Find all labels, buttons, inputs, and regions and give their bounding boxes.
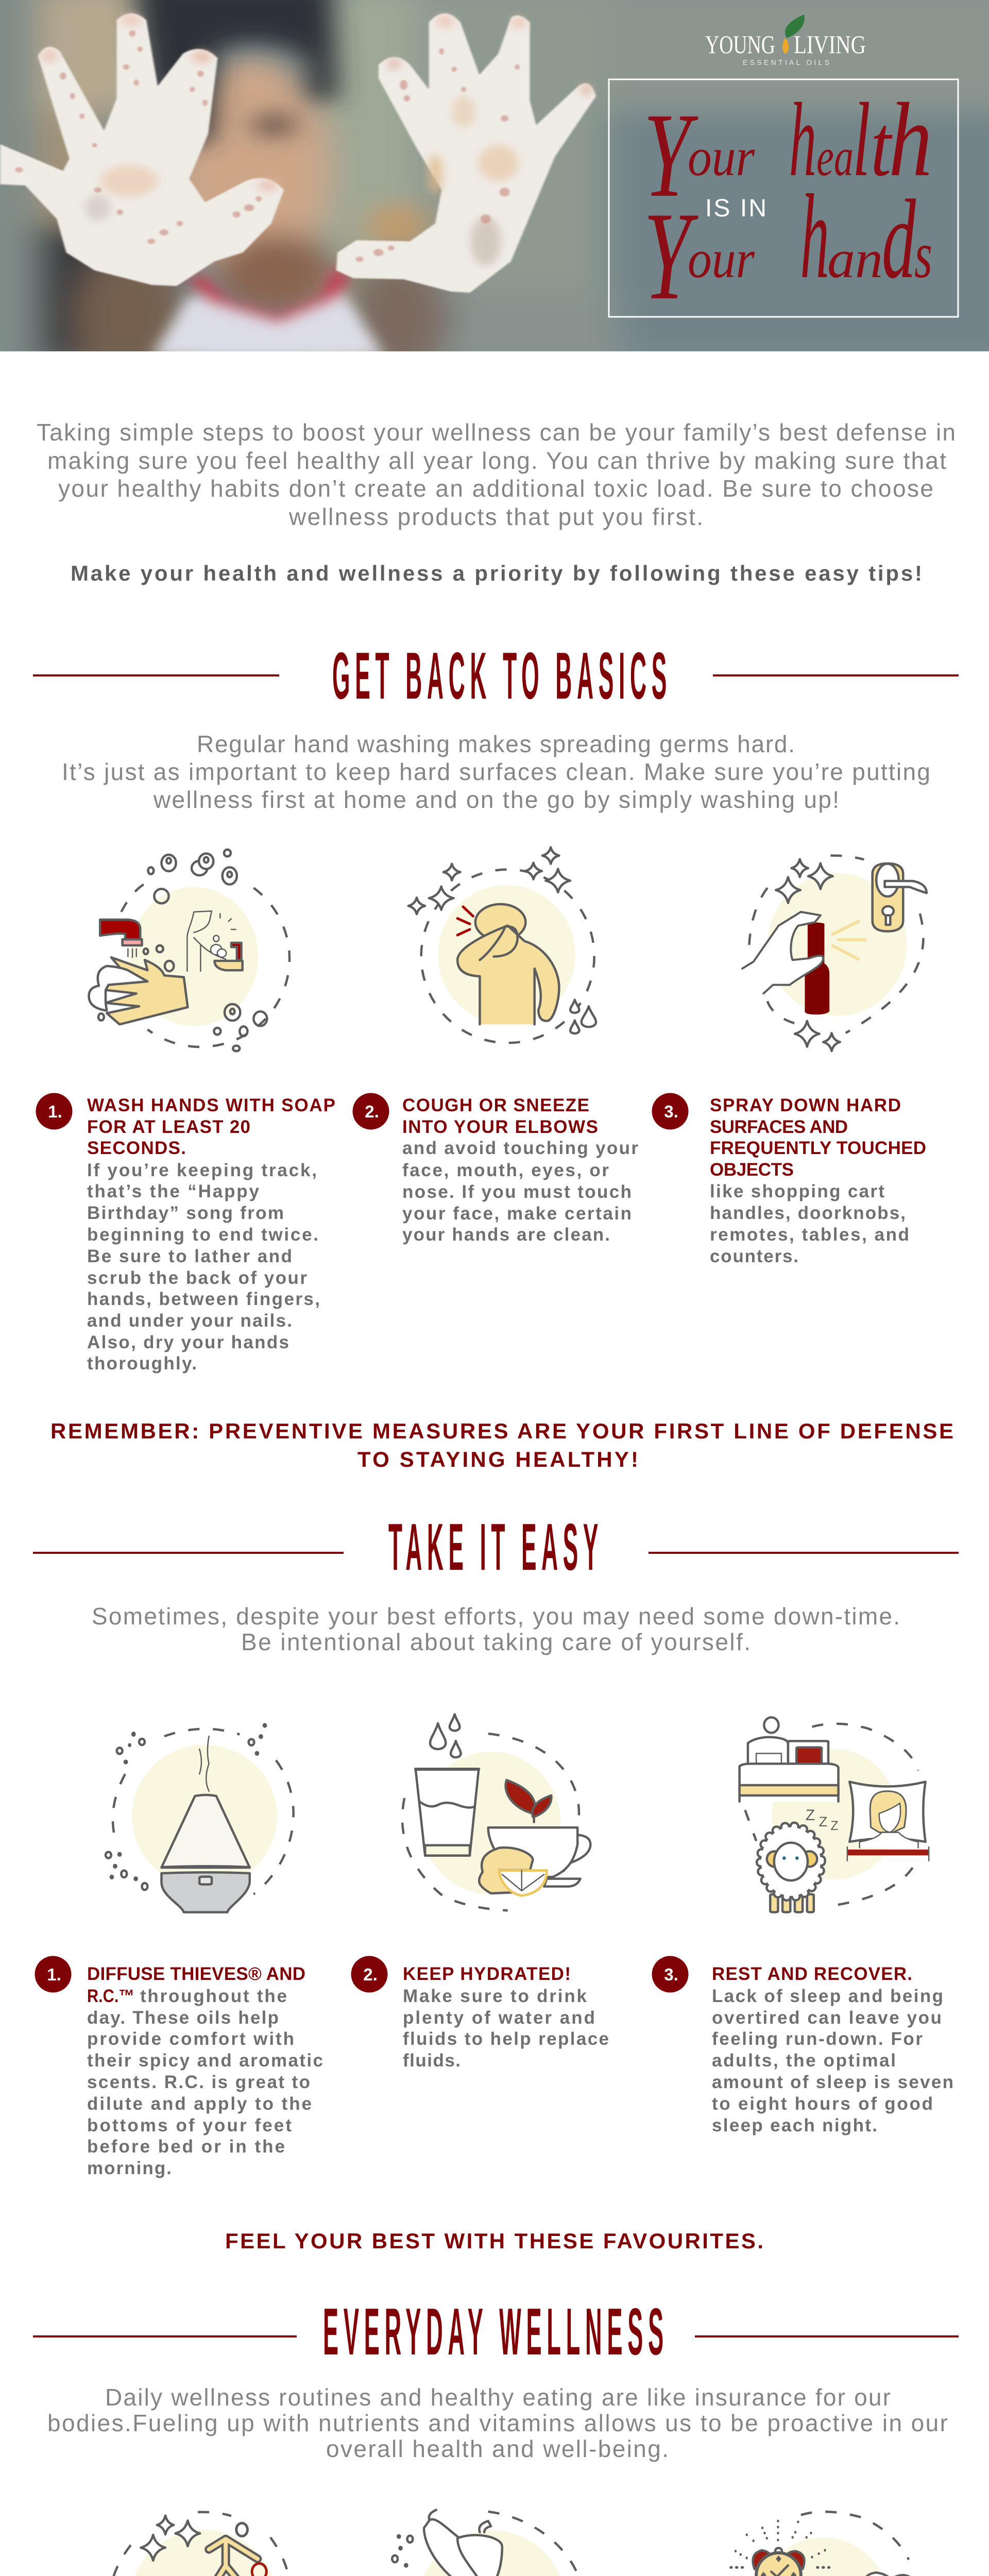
icon: bed, sheep and sleeper bbox=[740, 1717, 929, 1912]
tip 1: wash hands bbox=[36, 1093, 335, 1374]
section intro: basics: wellness first at home and on the go by simply washing up! bbox=[153, 786, 839, 813]
icon: exercise figures bbox=[101, 2512, 291, 2576]
tip 1: wash hands: Be sure to lather and bbox=[87, 1246, 292, 1266]
label: sleeping Zs: Z bbox=[806, 1807, 815, 1824]
tip 1: wash hands: thoroughly. bbox=[87, 1353, 197, 1374]
tip 1: diffuse: R.C.™ bbox=[87, 1986, 134, 2006]
tip 1: wash hands: that’s the “Happy bbox=[87, 1181, 260, 1201]
tip 1: diffuse: throughout the bbox=[140, 1986, 287, 2006]
hero title box: h bbox=[775, 81, 816, 198]
tip 3: rest: adults, the optimal bbox=[712, 2050, 896, 2071]
tip 1: wash hands: 1. bbox=[48, 1102, 62, 1121]
tip 1: diffuse: scents. R.C. is great to bbox=[87, 2072, 310, 2092]
soap foam speckles bbox=[15, 30, 520, 262]
Young Living logo bbox=[705, 14, 866, 66]
hero title box: our bbox=[688, 127, 755, 187]
tip 1: wash hands: Birthday” song from bbox=[87, 1203, 284, 1223]
tip 2: hydrate: 2. bbox=[363, 1965, 378, 1984]
tip 1: wash hands: scrub the back of your bbox=[87, 1268, 307, 1288]
tip 1: diffuse: DIFFUSE THIEVES® AND bbox=[87, 1964, 305, 1984]
Young Living logo: YOUNG bbox=[705, 30, 775, 59]
hero title box: h bbox=[786, 170, 829, 303]
hero title box: Y bbox=[643, 88, 698, 222]
section intro: basics bbox=[62, 731, 930, 813]
icon: healthy foods bbox=[392, 2510, 611, 2576]
intro text: Taking simple steps to boost your wellness can be your family’s best defense in bbox=[37, 419, 956, 446]
tip 2: cough or sneeze: your face, make certain bbox=[402, 1204, 632, 1224]
tip 2: cough or sneeze bbox=[352, 1093, 638, 1245]
tip 2: cough or sneeze: face, mouth, eyes, or bbox=[402, 1160, 609, 1180]
tip 1: diffuse: dilute and apply to the bbox=[87, 2094, 312, 2114]
tip 3: rest: to eight hours of good bbox=[712, 2094, 933, 2114]
label: sleeping Zs: Z bbox=[819, 1814, 827, 1829]
tip 2: cough or sneeze: COUGH OR SNEEZE bbox=[402, 1095, 589, 1115]
icon: water, tea and lemon bbox=[402, 1714, 590, 1910]
tip 1: diffuse: their spicy and aromatic bbox=[87, 2050, 323, 2071]
icon: diffuser bbox=[106, 1723, 294, 1912]
hero title box: t bbox=[871, 97, 893, 194]
section intro: take it easy: Sometimes, despite your best efforts, you may need some down-time. bbox=[92, 1603, 900, 1630]
tip 1: diffuse: day. These oils help bbox=[87, 2008, 279, 2028]
section intro: everyday wellness: Daily wellness routines and healthy eating are like insurance for our bbox=[105, 2384, 891, 2411]
section intro: basics: It’s just as important to keep hard surfaces clean. Make sure you’re putting bbox=[62, 758, 930, 785]
hero title box: s bbox=[914, 218, 932, 292]
tip 2: hydrate: fluids. bbox=[403, 2050, 461, 2071]
section heading: everyday wellness bbox=[33, 2295, 959, 2369]
tip 1: diffuse bbox=[35, 1956, 323, 2178]
tip 2: cough or sneeze: your hands are clean. bbox=[402, 1225, 610, 1245]
hero photo: child with soapy hands bbox=[0, 0, 989, 384]
hero title box: ea bbox=[816, 127, 854, 187]
tip 3: spray hard surfaces: 3. bbox=[664, 1102, 678, 1121]
hero title box: h bbox=[889, 81, 932, 198]
tip 3: rest: feeling run-down. For bbox=[712, 2029, 923, 2049]
tip 1: wash hands: SECONDS. bbox=[87, 1138, 186, 1158]
tip 1: wash hands: WASH HANDS WITH SOAP bbox=[87, 1095, 335, 1115]
section intro: everyday wellness: bodies.Fueling up with nutrients and vitamins allows us to be proactive in our bbox=[47, 2410, 948, 2436]
tip 1: wash hands: If you’re keeping track, bbox=[87, 1160, 317, 1180]
tip 2: hydrate: fluids to help replace bbox=[403, 2029, 609, 2049]
tip 2: cough or sneeze: and avoid touching your bbox=[402, 1138, 638, 1158]
tip 3: spray hard surfaces: counters. bbox=[710, 1246, 798, 1266]
tip 1: diffuse: before bed or in the bbox=[87, 2137, 285, 2157]
tip 3: rest: overtired can leave you bbox=[712, 2008, 942, 2028]
tip 3: spray hard surfaces: FREQUENTLY TOUCHED bbox=[710, 1138, 926, 1158]
tip 3: spray hard surfaces: SURFACES AND bbox=[710, 1117, 848, 1137]
Young Living logo: LIVING bbox=[794, 30, 866, 59]
icon: alarm clock, moon and clouds bbox=[729, 2512, 926, 2576]
label: sleeping Zs bbox=[806, 1807, 839, 1833]
hero title box: an bbox=[827, 229, 883, 289]
tip 3: rest: amount of sleep is seven bbox=[712, 2072, 953, 2092]
tip 2: hydrate: Make sure to drink bbox=[403, 1986, 587, 2006]
intro text: making sure you feel healthy all year long. You can thrive by making sure that bbox=[47, 447, 946, 474]
intro text: your healthy habits don’t create an additional toxic load. Be sure to choose bbox=[58, 475, 933, 502]
hero title box: our bbox=[688, 229, 755, 289]
icon: spray bottle and door handle bbox=[742, 856, 927, 1051]
label: sleeping Zs: Z bbox=[830, 1819, 839, 1833]
section heading: get back to basics bbox=[33, 639, 959, 713]
Young Living logo: ESSENTIAL OILS bbox=[743, 58, 829, 66]
callout: feel your best: FEEL YOUR BEST WITH THESE FAVOURITES. bbox=[225, 2229, 763, 2253]
section intro: take it easy bbox=[92, 1603, 900, 1655]
intro text bbox=[37, 419, 956, 585]
hero title box bbox=[609, 79, 958, 326]
tip 3: spray hard surfaces: remotes, tables, and bbox=[710, 1225, 909, 1245]
tip 1: wash hands: FOR AT LEAST 20 bbox=[87, 1117, 250, 1137]
callout: remember: REMEMBER: PREVENTIVE MEASURES ARE YOUR FIRST LINE OF DEFENSE bbox=[50, 1419, 953, 1443]
tip 3: rest: Lack of sleep and being bbox=[712, 1986, 943, 2006]
tip 3: rest bbox=[652, 1956, 953, 2136]
tip 1: wash hands: and under your nails. bbox=[87, 1311, 292, 1331]
callout: remember: TO STAYING HEALTHY! bbox=[357, 1447, 638, 1471]
section heading: take it easy bbox=[33, 1510, 959, 1584]
section intro: basics: Regular hand washing makes spreading germs hard. bbox=[197, 731, 795, 757]
tip 3: spray hard surfaces: like shopping cart bbox=[710, 1181, 884, 1201]
section intro: take it easy: Be intentional about taking care of yourself. bbox=[241, 1629, 751, 1655]
section intro: everyday wellness: overall health and well-being. bbox=[326, 2435, 669, 2462]
tip 3: spray hard surfaces bbox=[652, 1093, 926, 1266]
tip 3: spray hard surfaces: OBJECTS bbox=[710, 1160, 794, 1180]
tip 1: wash hands: Also, dry your hands bbox=[87, 1332, 289, 1352]
tip 2: hydrate: plenty of water and bbox=[403, 2008, 595, 2028]
tip 2: cough or sneeze: 2. bbox=[365, 1102, 379, 1121]
hero title box: l bbox=[852, 81, 871, 198]
icon: washing hands bbox=[89, 850, 289, 1051]
intro text: wellness products that put you first. bbox=[288, 503, 703, 530]
tip 2: cough or sneeze: nose. If you must touch bbox=[402, 1182, 632, 1202]
tip 1: diffuse: provide comfort with bbox=[87, 2029, 294, 2049]
tip 1: wash hands: beginning to end twice. bbox=[87, 1225, 318, 1245]
intro text: Make your health and wellness a priority by following these easy tips! bbox=[71, 561, 922, 585]
hero title box: IS IN bbox=[705, 195, 766, 222]
hero title box: d bbox=[882, 176, 916, 302]
tip 3: rest: sleep each night. bbox=[712, 2115, 877, 2136]
hero banner bbox=[0, 0, 989, 384]
section intro: everyday wellness bbox=[47, 2384, 948, 2462]
tip 2: cough or sneeze: INTO YOUR ELBOWS bbox=[402, 1117, 598, 1137]
hero title box: Y bbox=[643, 186, 698, 326]
tip 3: spray hard surfaces: handles, doorknobs, bbox=[710, 1203, 906, 1223]
tip 3: rest: REST AND RECOVER. bbox=[712, 1964, 912, 1984]
tip 1: diffuse: 1. bbox=[47, 1965, 61, 1984]
tip 2: hydrate bbox=[351, 1956, 609, 2071]
tip 2: hydrate: KEEP HYDRATED! bbox=[403, 1964, 571, 1984]
tip 1: diffuse: morning. bbox=[87, 2158, 172, 2178]
tip 3: spray hard surfaces: SPRAY DOWN HARD bbox=[710, 1095, 901, 1115]
callout: remember bbox=[50, 1419, 953, 1471]
tip 3: rest: 3. bbox=[664, 1965, 678, 1984]
tip 1: diffuse: bottoms of your feet bbox=[87, 2115, 292, 2136]
tip 1: wash hands: hands, between fingers, bbox=[87, 1289, 320, 1309]
icon: sneeze into elbow bbox=[408, 848, 596, 1043]
